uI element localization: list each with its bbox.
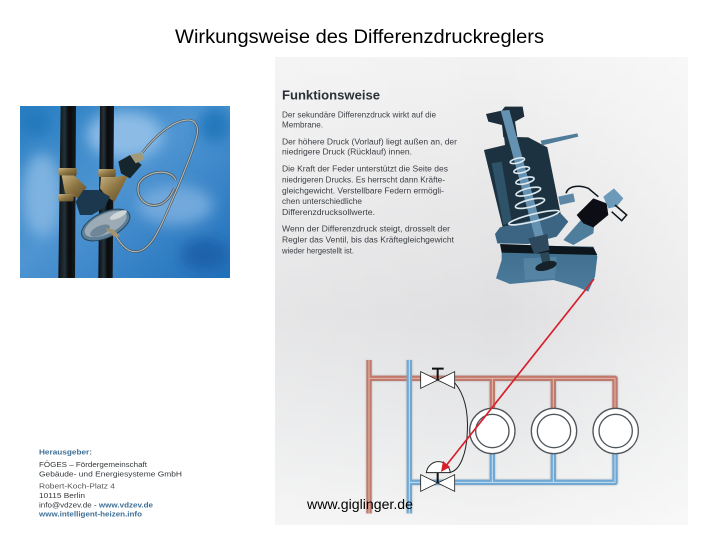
piping schematic [369,360,638,513]
heading: Funktionsweise: Funktionsweise [282,88,380,102]
control line [450,383,468,472]
secondary valve [563,212,595,245]
supply pipes [369,360,615,513]
publisher block: info@vdzev.de - www.vdzev.de [39,502,153,509]
publisher block: Robert-Koch-Platz 4 [39,484,115,491]
text block: function description: Regler das Ventil, bis das Kräftegleichgewicht [282,236,455,245]
right pipe [98,106,114,278]
upper valve [421,369,455,388]
text block: function description: chen unterschiedliche [282,197,363,206]
text block: function description: Der höhere Druck (Vorlauf) liegt außen an, der [282,138,457,146]
radiators [470,408,638,454]
publisher block: 10115 Berlin [39,493,85,500]
text block: function description: Membrane. [282,120,323,130]
return pipes [409,360,615,513]
lower pipe body [496,245,597,292]
publisher block: www.intelligent-heizen.info [38,512,142,519]
text block: function description [281,110,457,255]
top cap [486,107,524,137]
red arrow [441,279,594,472]
spring [508,157,560,228]
publisher block: Herausgeber: [39,450,92,457]
title: Wirkungsweise des Differenzdruckreglers [175,26,544,48]
membrane disc [81,208,130,242]
text block: function description: wieder hergestellt ist. [281,246,354,255]
panel: Funktionsweise [275,57,688,525]
capillary connector [118,155,142,178]
text block: function description: Differenzdrucksollwerte. [282,208,375,217]
publisher block: FÖGES – Fördergemeinschaft [39,461,147,469]
regulator cutaway illustration [484,107,627,292]
brass fittings [58,168,77,175]
valve stem [501,110,544,239]
text block: function description: gleichgewicht. Verstellbare Federn ermögli- [282,186,444,195]
photo: differential pressure regulator on pipes [19,106,231,278]
text block: function description: Der sekundäre Differenzdruck wirkt auf die [282,110,437,120]
housing [484,137,561,230]
publisher block: Gebäude- und Energiesysteme GmbH [39,472,182,479]
text block: function description: niedrigere Druck (Rücklauf) innen. [282,148,412,156]
lower regulator valve [421,462,455,491]
adjuster stem [541,133,578,145]
text block: function description: Die Kraft der Feder unterstützt die Seite des [282,165,448,174]
left pipe [58,106,76,278]
watermark url: www.giglinger.de [306,497,413,512]
text block: function description: Wenn der Differenzdruck steigt, drosselt der [282,225,450,234]
dark valve head [76,190,110,215]
publisher block [38,450,182,519]
capillary tube [115,120,198,252]
side connector [558,193,575,205]
top plate [495,213,568,244]
text block: function description: niedrigeren Drucks. Es herrscht dann Kräfte- [282,176,445,185]
